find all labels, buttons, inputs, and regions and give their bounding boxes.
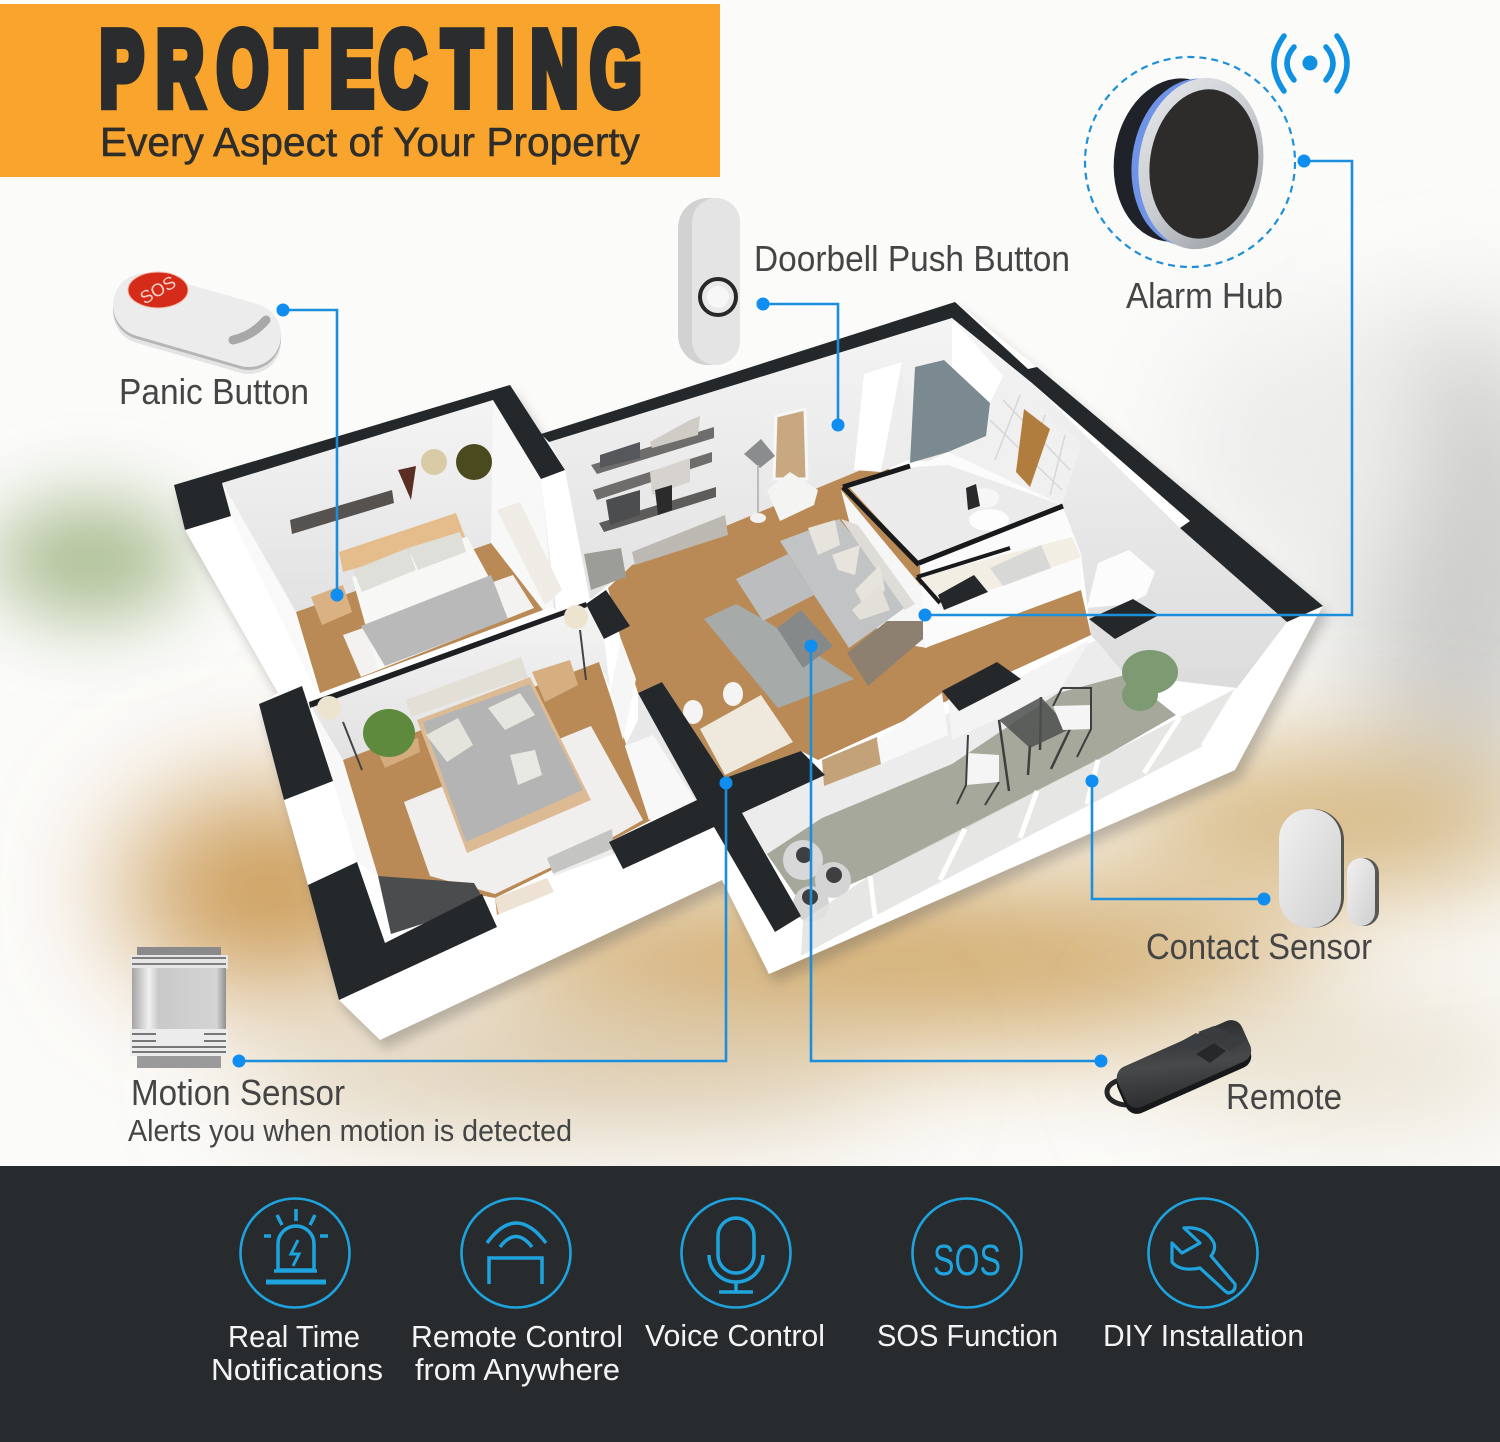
feature: voice control: [645, 1198, 825, 1353]
partition wall between bedrooms: [309, 604, 610, 760]
device: panic button: [128, 272, 266, 342]
feature: remote control: [411, 1198, 623, 1387]
open doorway: [854, 362, 906, 472]
living room wood floor: [608, 460, 1091, 778]
feature: real time notifications: [211, 1198, 383, 1387]
black wall tops: [174, 302, 1323, 1000]
feature: diy installation: [1103, 1198, 1304, 1353]
balcony glass rail: [769, 688, 1237, 974]
bath and kitchen block: [841, 452, 1081, 648]
dining table: [683, 682, 793, 775]
caption: motion sensor: Alerts you when motion is detected: [128, 1113, 572, 1148]
living rug: [704, 604, 854, 708]
bedroom 2 rug: [404, 726, 643, 894]
bedroom 1 walls: [222, 400, 586, 693]
wardrobe: [910, 360, 990, 463]
bedroom door: [610, 639, 636, 740]
bedroom 2 floor: [343, 662, 651, 898]
sofa: [736, 519, 915, 648]
label: motion sensor: Motion Sensor: [131, 1072, 345, 1113]
balcony low walls: [822, 640, 1090, 786]
icon: microphone: [682, 1198, 790, 1308]
feature: sos function: [877, 1198, 1058, 1353]
wall shelf and masks: [290, 444, 492, 534]
hob: [938, 575, 988, 610]
label: Real Time: [228, 1319, 360, 1354]
icon: wrench: [1148, 1198, 1258, 1308]
icon: sos: [912, 1198, 1022, 1308]
sink: [990, 545, 1051, 586]
icon: garage arcs: [462, 1198, 570, 1308]
label: contact sensor: Contact Sensor: [1146, 926, 1372, 967]
bedroom 2 bed: [406, 657, 591, 853]
device: panic button: SOS: [137, 272, 179, 308]
device: doorbell push button: [678, 198, 740, 365]
floor plan: [174, 302, 1328, 1049]
tv and desk: [378, 829, 625, 945]
main room walls: [549, 318, 1287, 688]
title: PROTECTING: [100, 9, 641, 128]
bedroom 1 rug: [343, 575, 534, 677]
plan drop shadow: [179, 311, 1328, 1049]
device: alarm hub: [1085, 36, 1347, 267]
device: contact sensor: [1279, 809, 1379, 928]
connector dots: [232, 154, 1310, 1068]
label: alarm hub: Alarm Hub: [1126, 275, 1283, 316]
vases: [783, 840, 851, 922]
label line two: from Anywhere: [415, 1352, 620, 1387]
bedroom 2 left wall: [311, 706, 378, 876]
icon: alarm beacon: [240, 1198, 350, 1308]
white cabinet: [625, 693, 697, 820]
bathroom interior: [849, 465, 1062, 563]
connector lines: [239, 161, 1352, 1061]
tiled wall and door: [948, 376, 1081, 505]
nightstand: [311, 585, 352, 625]
balcony floor: [767, 675, 1176, 905]
side tables: [847, 621, 923, 686]
partition top edge: [309, 602, 587, 708]
fridge: [1087, 550, 1155, 608]
header banner: [0, 4, 720, 177]
subtitle: Every Aspect of Your Property: [100, 119, 640, 165]
balcony table and chairs: [957, 688, 1091, 805]
bedroom 1 floor: [296, 543, 543, 693]
kitchen counter: [919, 537, 1081, 608]
label: Voice Control: [645, 1318, 825, 1353]
label: doorbell push button: Doorbell Push Button: [754, 238, 1070, 279]
balcony back wall: [742, 640, 1125, 860]
bedroom 1 shelf unit: [497, 502, 562, 605]
device: remote: [1107, 1016, 1255, 1118]
nightstand, plant and lamps: [317, 605, 588, 770]
feature band: [0, 1166, 1500, 1442]
bedroom 1 bed: [339, 513, 508, 670]
coffee table: [777, 610, 833, 668]
kitchen black edge: [917, 548, 1010, 603]
label: panic button: Panic Button: [119, 371, 309, 412]
balcony plant: [1122, 650, 1178, 711]
label: Remote Control: [411, 1319, 623, 1354]
icon: wireless signal: [1274, 36, 1347, 91]
label: DIY Installation: [1103, 1318, 1304, 1353]
icon: sos: SOS: [933, 1236, 1001, 1285]
mirror and lamp: [744, 409, 818, 523]
device: motion sensor: [130, 947, 228, 1068]
label: remote: Remote: [1226, 1076, 1342, 1117]
label: SOS Function: [877, 1318, 1058, 1353]
shelving: [584, 416, 728, 590]
label line two: Notifications: [211, 1352, 383, 1387]
outer white walls: [174, 302, 1323, 1040]
